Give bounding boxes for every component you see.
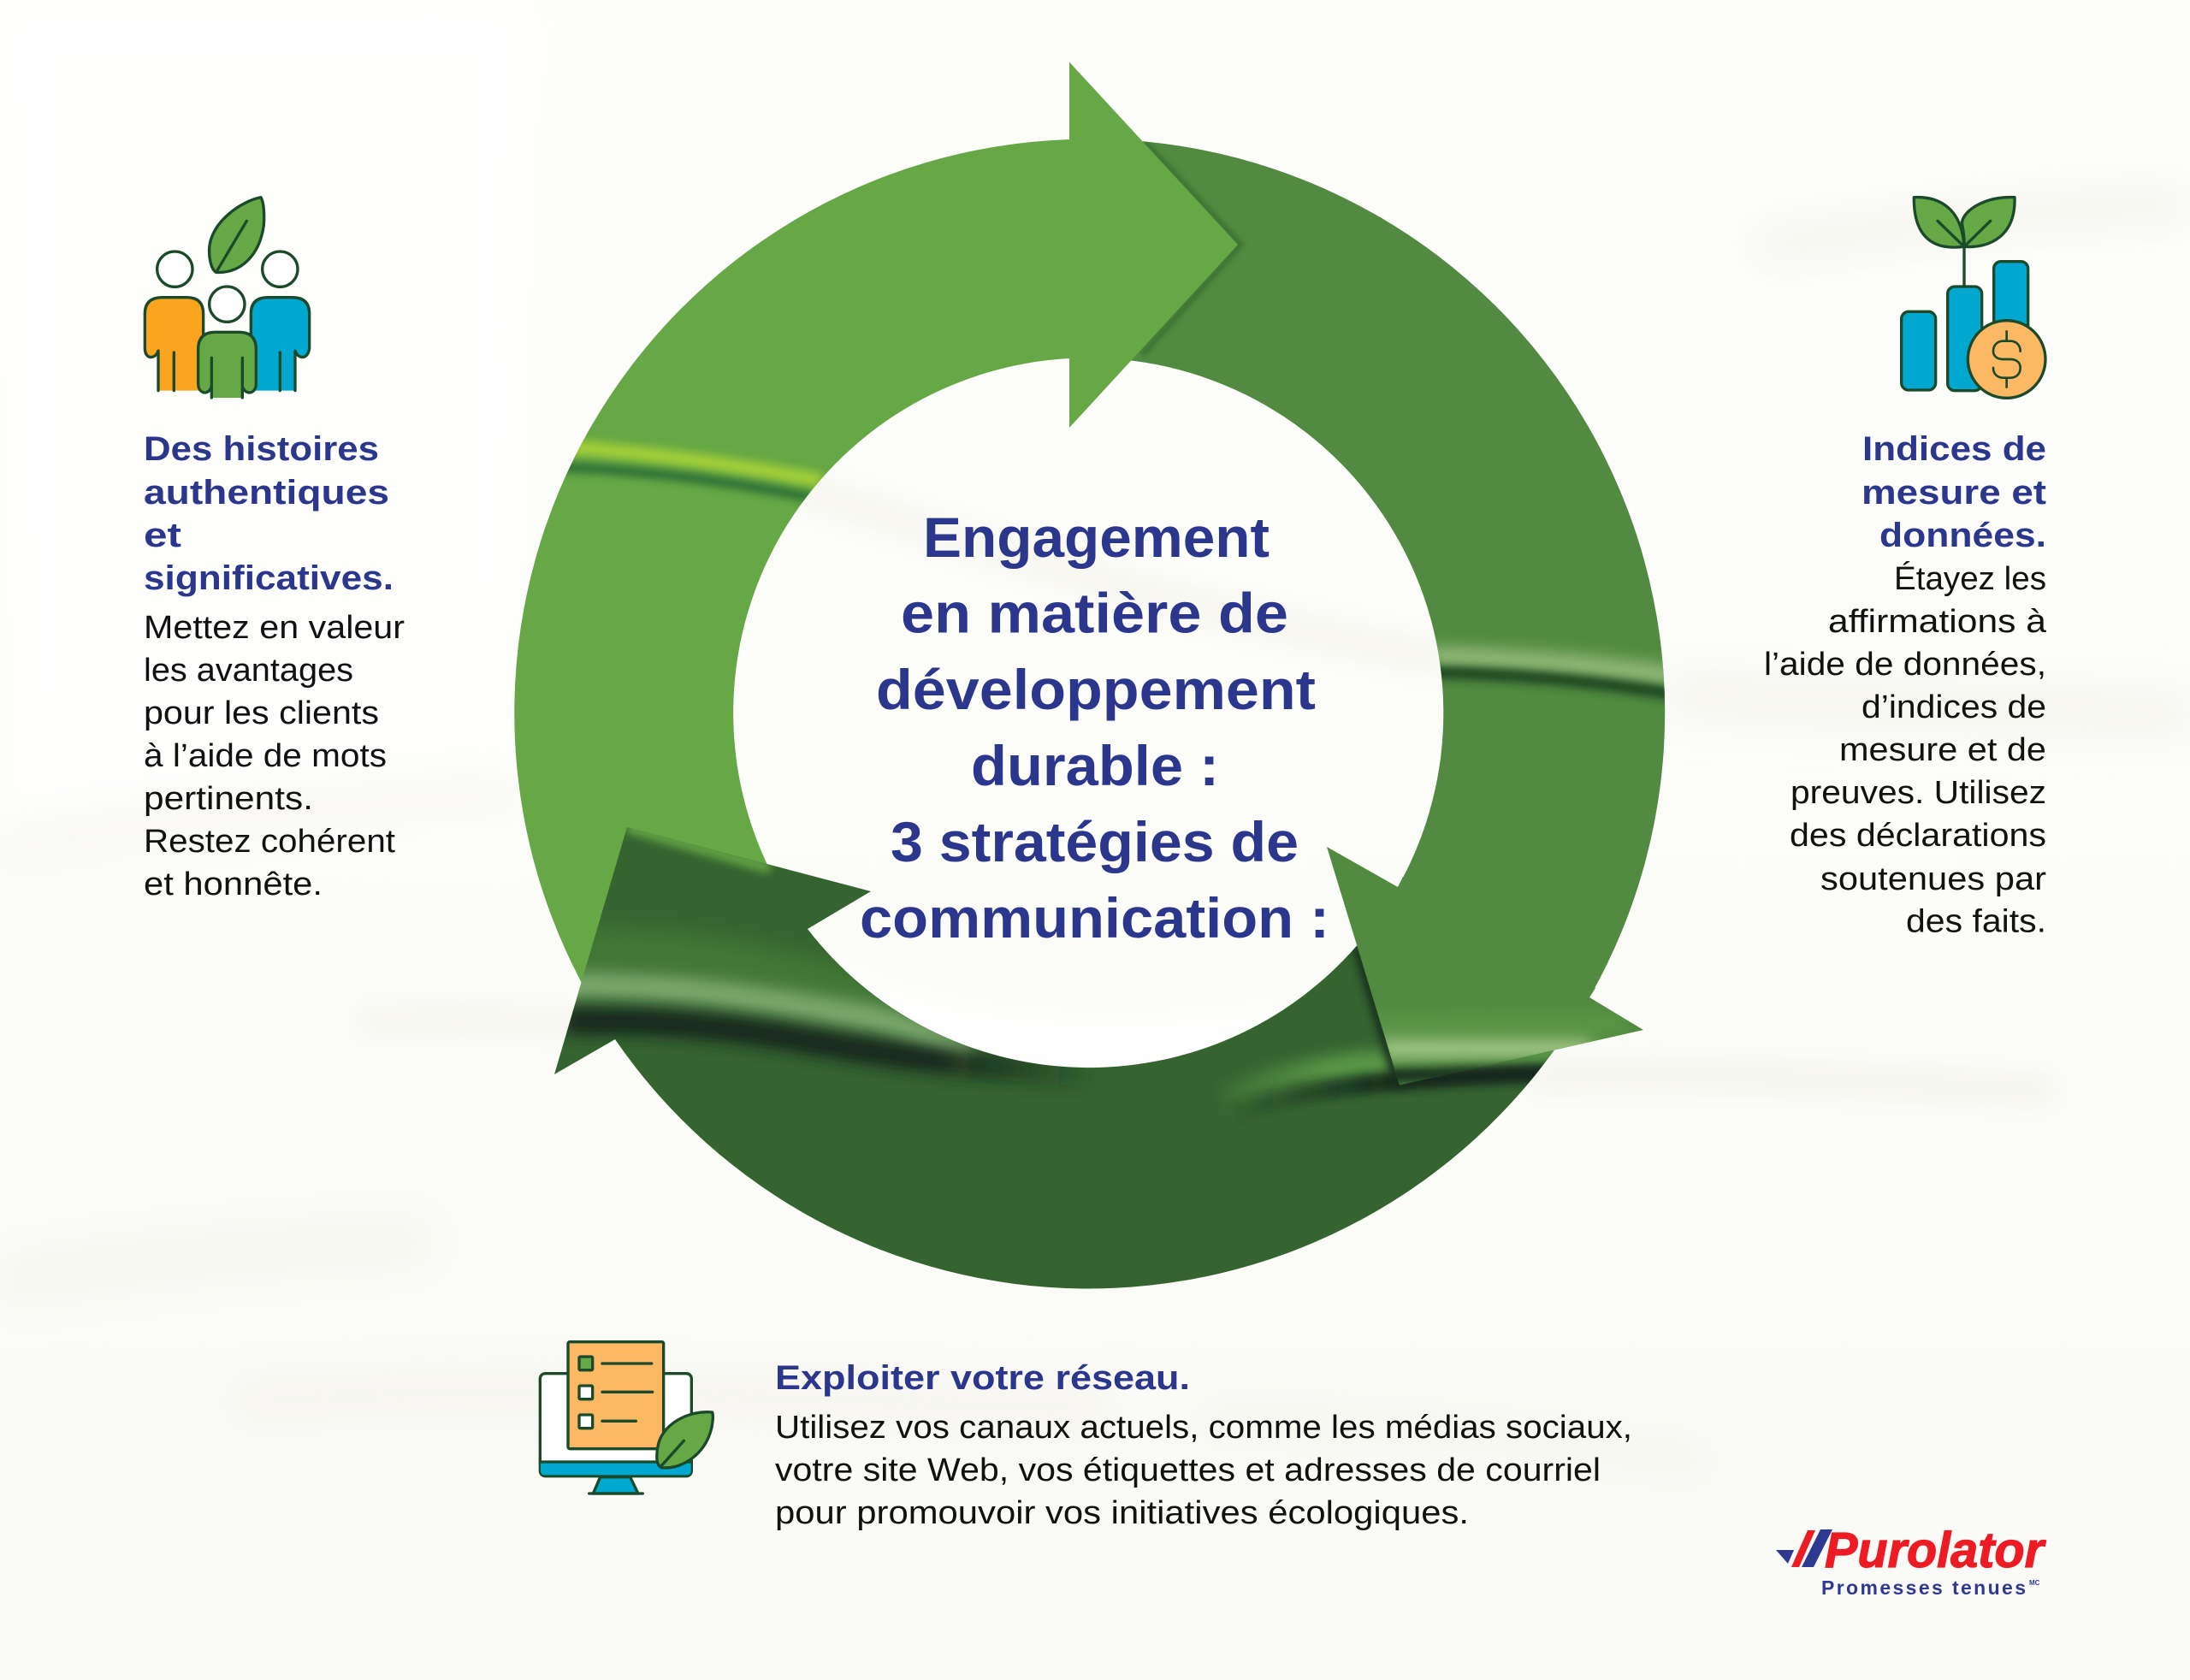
bottom text: leverage your network: pour promouvoir vos initiatives écologiques. [775, 1495, 1469, 1531]
right text: metrics and data: d’indices de [1862, 689, 2046, 725]
title [860, 506, 1329, 949]
right text: metrics and data: mesure et de [1839, 732, 2046, 768]
left text: authentic stories: et [144, 517, 181, 554]
arrow: light green [514, 62, 1238, 983]
left text: authentic stories: pertinents. [144, 781, 313, 817]
left text: authentic stories: Des histoires [144, 430, 379, 468]
right text: metrics and data: données. [1879, 517, 2046, 554]
left text: authentic stories: Restez cohérent [144, 824, 395, 860]
left text: authentic stories: à l’aide de mots [144, 738, 387, 774]
right text: metrics and data: affirmations à [1828, 604, 2047, 640]
right text: metrics and data [1764, 430, 2047, 939]
left text: authentic stories: significatives. [144, 559, 394, 597]
logo: Purolator: Purolator [1825, 1523, 2046, 1578]
left text: authentic stories: Mettez en valeur [144, 610, 405, 646]
bottom text: leverage your network: votre site Web, vos étiquettes et adresses de courriel [775, 1452, 1601, 1488]
right text: metrics and data: mesure et [1862, 474, 2046, 512]
right text: metrics and data: preuves. Utilisez [1790, 775, 2046, 811]
icon: people and leaf [145, 198, 310, 398]
right text: metrics and data: soutenues par [1820, 861, 2046, 897]
bottom text: leverage your network [775, 1359, 1632, 1531]
right text: metrics and data: l’aide de données, [1764, 647, 2046, 683]
logo: Purolator: Promesses tenues [1821, 1576, 2026, 1599]
icon: sprout, bars and coin [1902, 198, 2045, 398]
left text: authentic stories [144, 430, 405, 902]
arrow head: mid green [1327, 847, 1643, 1085]
wave highlight on mid green arrow head [1369, 1023, 1625, 1076]
right text: metrics and data: des faits. [1906, 903, 2046, 939]
left text: authentic stories: pour les clients [144, 695, 379, 731]
title: en matière de [901, 582, 1288, 645]
title: communication : [860, 886, 1329, 949]
right text: metrics and data: des déclarations [1790, 818, 2046, 854]
icon: monitor, checklist and leaf [540, 1342, 713, 1494]
bottom text: leverage your network: Utilisez vos canaux actuels, comme les médias sociaux, [775, 1410, 1632, 1446]
logo: Purolator: MC [2029, 1579, 2040, 1587]
bottom text: leverage your network: Exploiter votre réseau. [775, 1359, 1190, 1397]
cycle diagram: three curved arrows [514, 62, 1677, 1288]
left text: authentic stories: les avantages [144, 653, 353, 689]
wave highlights on dark green arrow [565, 827, 1566, 1112]
left text: authentic stories: et honnête. [144, 867, 323, 902]
arc segment: mid green [1088, 139, 1665, 997]
arrow: dark green [554, 827, 1555, 1288]
title: 3 stratégies de [891, 810, 1299, 873]
title: Engagement [923, 506, 1270, 569]
right text: metrics and data: Indices de [1862, 430, 2046, 468]
wave highlight on light green arrow [560, 447, 821, 498]
right text: metrics and data: Étayez les [1894, 560, 2046, 597]
title: durable : [971, 734, 1219, 797]
logo: Purolator [1776, 1523, 2046, 1599]
wave highlight on mid green arc [1142, 141, 1677, 695]
title: développement [876, 658, 1316, 721]
left text: authentic stories: authentiques [144, 474, 389, 512]
